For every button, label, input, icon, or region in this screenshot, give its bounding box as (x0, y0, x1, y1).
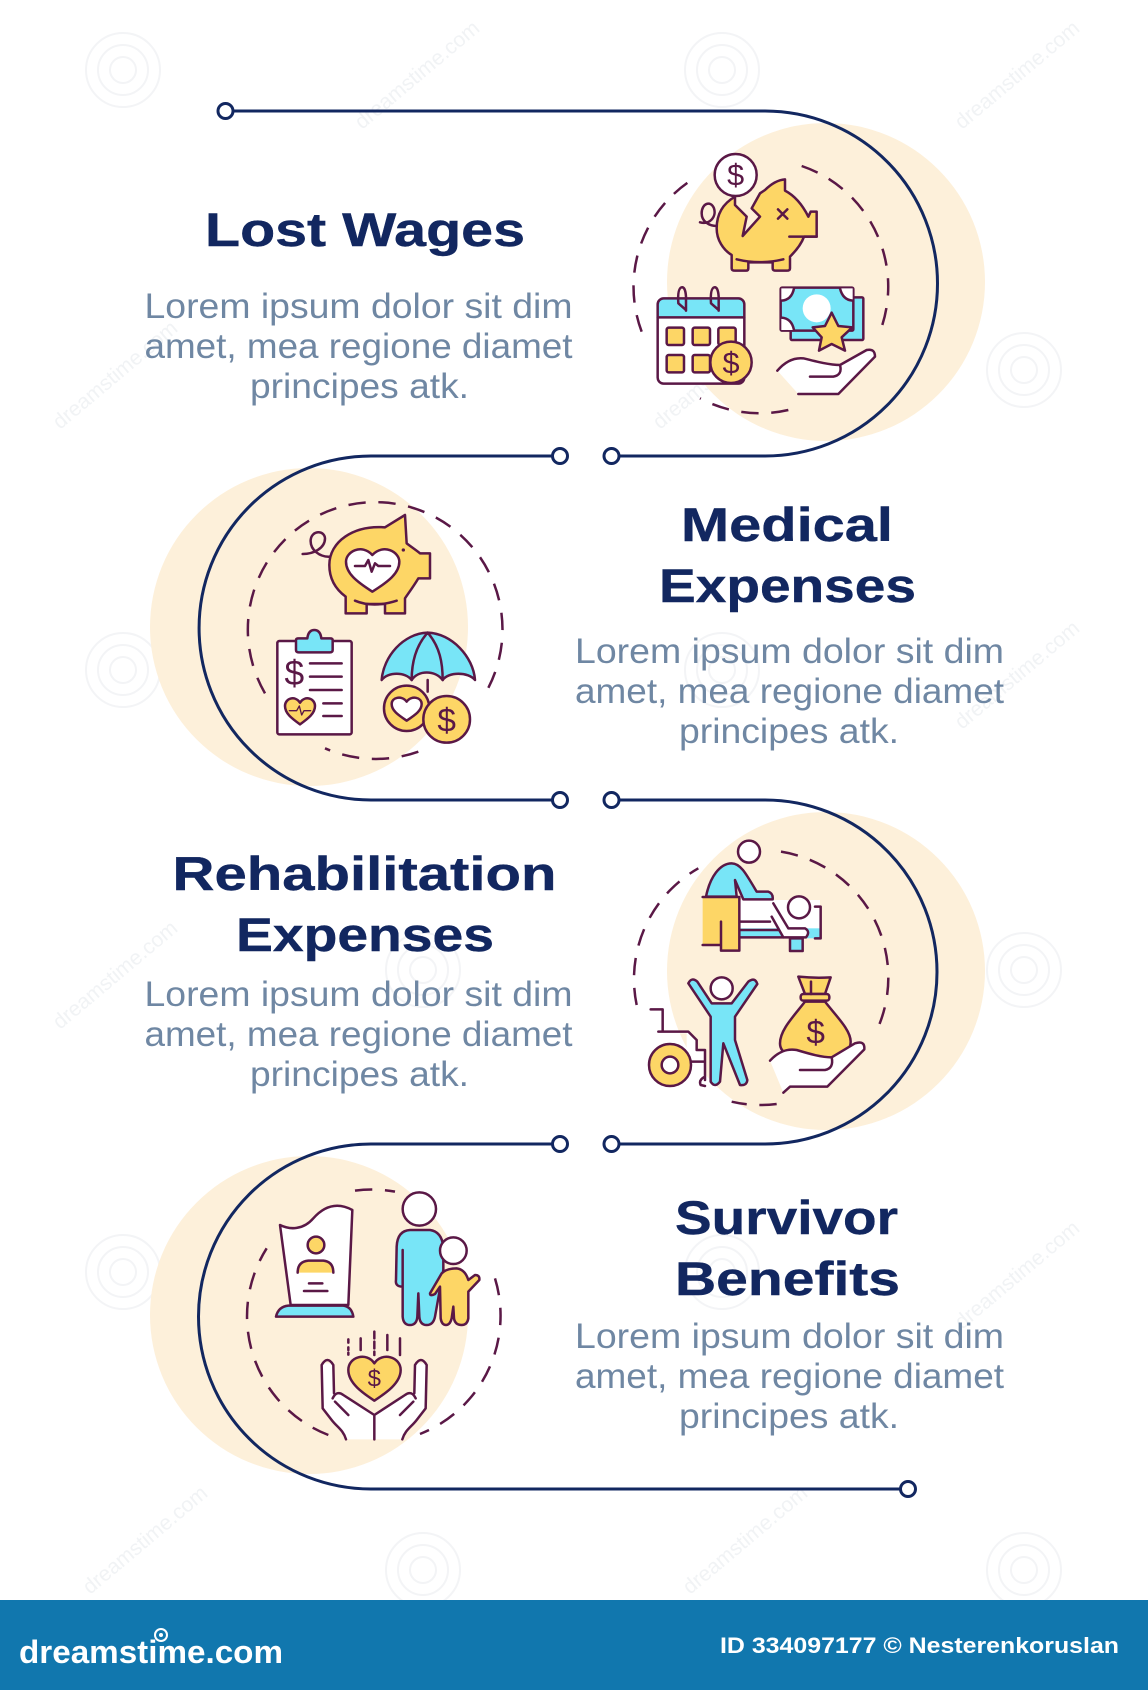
heading: Survivor Benefits: Benefits (675, 1252, 900, 1305)
heading: Rehabilitation Expenses (172, 847, 556, 961)
icon: umbrella over coins (382, 633, 475, 743)
panel: medical expenses icon (248, 502, 502, 759)
icon: parent and child (396, 1192, 479, 1325)
icon: memorial headstone (276, 1206, 353, 1317)
text block: survivor benefits description: principes atk. (679, 1397, 899, 1436)
text block: medical expenses description: amet, mea regione diamet (575, 672, 1004, 711)
panel: survivor benefits icon (247, 1190, 501, 1439)
icon: calendar with coin (658, 287, 752, 384)
infographic canvas: dreamstime.com (950, 1216, 1084, 1334)
icon: piggy bank with heart (303, 515, 430, 613)
heading: Survivor Benefits (675, 1191, 900, 1305)
panel: lost wages icon (634, 154, 888, 413)
text block: lost wages description: Lorem ipsum dolor sit dim (144, 287, 572, 326)
infographic canvas: dreamstime.com (950, 16, 1084, 134)
text block: rehabilitation expenses description: Lorem ipsum dolor sit dim (144, 975, 572, 1014)
icon: hands holding heart with dollar: $ (368, 1366, 381, 1393)
icon: coin above broken piggy bank: $ (727, 159, 744, 193)
infographic canvas: dreamstime.com (648, 316, 782, 434)
icon: recovered person and wheelchair (649, 977, 757, 1086)
infographic canvas: dreamstime.com (48, 316, 182, 434)
heading: Survivor Benefits: Survivor (675, 1191, 898, 1244)
icon: medical bill clipboard (277, 630, 352, 734)
infographic canvas: dreamstime.com (78, 1481, 212, 1599)
text block: rehabilitation expenses description: amet, mea regione diamet (144, 1015, 573, 1054)
footer credit: ID 334097177 © Nesterenkoruslan (720, 1633, 1119, 1658)
infographic canvas: dreamstime.com (350, 16, 484, 134)
connector: winding timeline path (198, 104, 938, 1496)
infographic canvas: dreamstime.com (48, 916, 182, 1034)
text block: medical expenses description (575, 632, 1004, 751)
icon: medical bill clipboard: $ (285, 654, 305, 693)
icon: money bag in hand: $ (806, 1014, 825, 1051)
icon: banknotes and star in hand (777, 288, 875, 394)
icon: therapist treating patient on bed (703, 841, 821, 951)
text block: medical expenses description: Lorem ipsum dolor sit dim (575, 632, 1004, 671)
background circle: lost wages (667, 123, 985, 441)
icon: umbrella over coins: $ (437, 702, 456, 739)
text block: rehabilitation expenses description (144, 975, 573, 1094)
icon: calendar with coin: $ (722, 346, 740, 380)
icon: coin above broken piggy bank (715, 154, 757, 196)
heading: Rehabilitation Expenses: Rehabilitation (172, 847, 556, 900)
infographic canvas: dreamstime.com (950, 616, 1084, 734)
icon: hands holding heart with dollar (322, 1332, 427, 1439)
heading: Medical Expenses: Medical (681, 498, 893, 551)
heading: Medical Expenses: Expenses (659, 559, 916, 612)
text block: lost wages description: principes atk. (250, 367, 469, 406)
text block: rehabilitation expenses description: principes atk. (250, 1055, 469, 1094)
text block: lost wages description (144, 287, 573, 406)
heading: Medical Expenses (659, 498, 916, 612)
infographic canvas: dreamstime.com (678, 1481, 812, 1599)
heading: Rehabilitation Expenses: Expenses (236, 908, 494, 961)
background circle: survivor benefits (150, 1156, 468, 1474)
icon: money bag in hand (770, 977, 864, 1093)
text block: medical expenses description: principes atk. (679, 712, 899, 751)
footer bar (0, 1600, 1148, 1690)
text block: survivor benefits description: amet, mea regione diamet (575, 1357, 1004, 1396)
background circle: rehabilitation expenses (667, 812, 985, 1130)
panel: rehabilitation expenses icon (634, 841, 888, 1105)
footer logo: dreamstime.com: dreamstime.com (19, 1634, 283, 1670)
text block: lost wages description: amet, mea regione diamet (144, 327, 573, 366)
text block: survivor benefits description: Lorem ipsum dolor sit dim (575, 1317, 1004, 1356)
background circle: medical expenses (150, 468, 468, 786)
heading: Lost Wages: Lost Wages (205, 203, 525, 256)
text block: survivor benefits description (575, 1317, 1004, 1436)
icon: broken piggy bank (700, 179, 817, 271)
